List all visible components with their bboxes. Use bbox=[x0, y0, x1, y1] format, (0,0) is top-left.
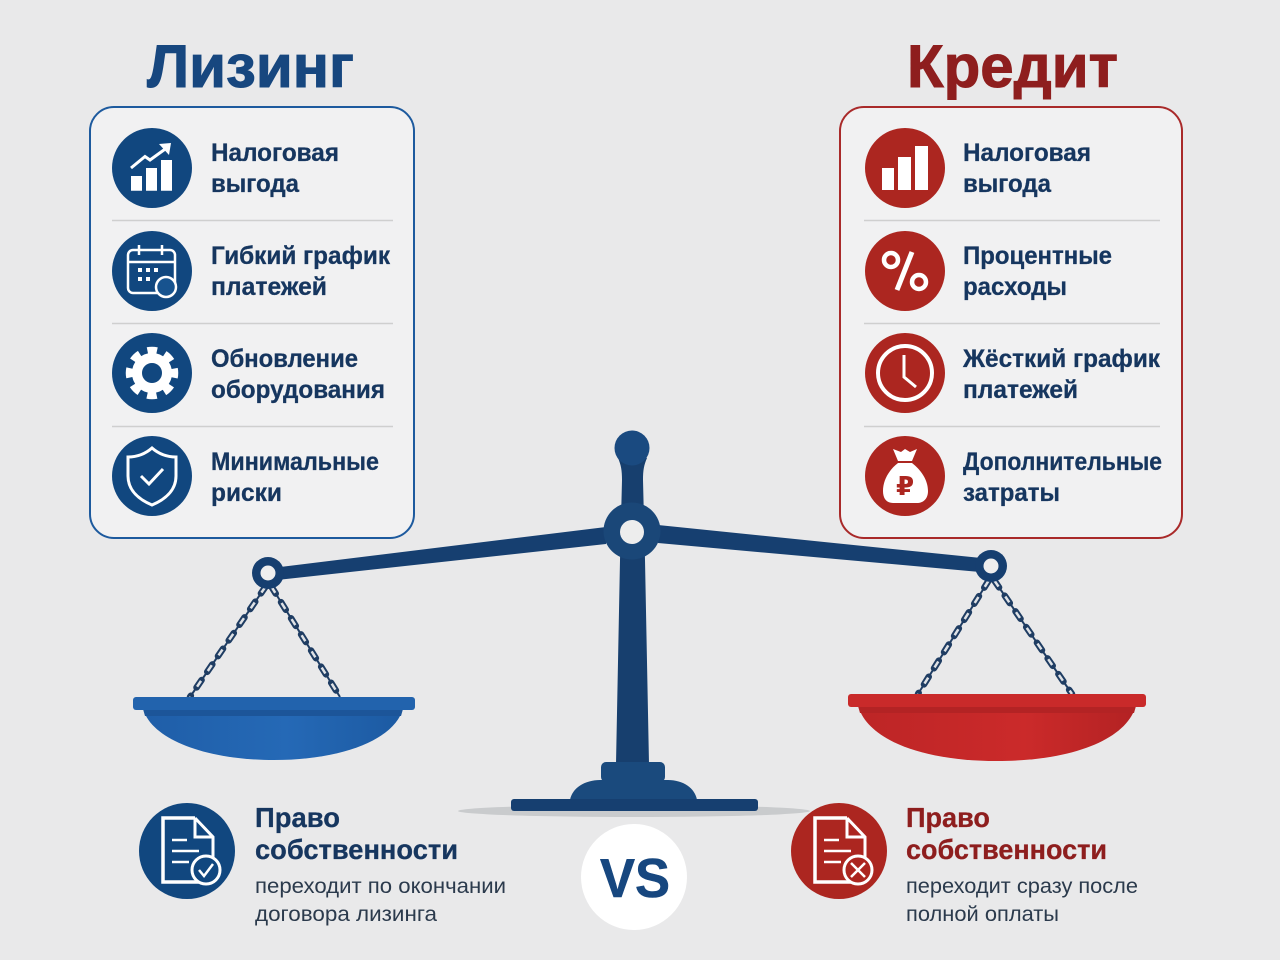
title: Кредит: Кредит bbox=[907, 33, 1118, 100]
icon: money bag bbox=[865, 436, 945, 516]
icon: gear bbox=[112, 333, 192, 413]
text: tax benefit bbox=[211, 139, 339, 198]
text: flexible schedule bbox=[211, 242, 390, 301]
left beam ring bbox=[252, 557, 284, 589]
beam bbox=[268, 525, 991, 581]
text: additional costs: затраты bbox=[963, 479, 1060, 507]
icon: money bag: ₽ bbox=[896, 471, 914, 501]
base bbox=[511, 762, 758, 811]
left pan bbox=[133, 697, 415, 760]
illustration: balance scale bbox=[133, 430, 1146, 817]
icon: growth chart bbox=[112, 128, 192, 208]
text: interest expenses: расходы bbox=[963, 273, 1067, 301]
text: interest expenses: Процентные bbox=[963, 242, 1112, 270]
text: rigid schedule: Жёсткий график bbox=[962, 345, 1160, 373]
text: rigid schedule bbox=[962, 345, 1160, 404]
text: equipment renewal: оборудования bbox=[211, 376, 385, 404]
text: minimal risks: Минимальные bbox=[211, 448, 379, 476]
text: ownership leasing: договора лизинга bbox=[255, 903, 437, 926]
icon: percent bbox=[865, 231, 945, 311]
text: minimal risks: риски bbox=[211, 479, 282, 507]
text: additional costs bbox=[963, 448, 1162, 507]
icon: shield bbox=[112, 436, 192, 516]
VS badge bbox=[581, 824, 687, 930]
icon: document cross bbox=[791, 803, 887, 899]
icon: clock bbox=[865, 333, 945, 413]
bottom block: leasing ownership bbox=[139, 802, 506, 926]
text: equipment renewal: Обновление bbox=[211, 345, 358, 373]
text: ownership leasing: переходит по окончании bbox=[255, 875, 506, 898]
bottom block: credit ownership bbox=[791, 802, 1138, 926]
title: Лизинг: Лизинг bbox=[147, 33, 354, 100]
left chains bbox=[190, 586, 340, 697]
text: tax benefit: Налоговая bbox=[963, 139, 1091, 167]
right beam ring bbox=[975, 550, 1007, 582]
text: ownership credit: Право bbox=[906, 802, 990, 833]
icon: bars bbox=[865, 128, 945, 208]
text: ownership credit: собственности bbox=[906, 834, 1107, 865]
knob bbox=[614, 430, 650, 466]
right chains bbox=[918, 580, 1072, 694]
hub bbox=[604, 502, 660, 560]
text: interest expenses bbox=[963, 242, 1112, 301]
column bbox=[616, 458, 649, 764]
text: ownership leasing: Право bbox=[255, 802, 340, 833]
text: tax benefit: выгода bbox=[963, 170, 1052, 198]
icon: calendar bbox=[112, 231, 192, 311]
text: tax benefit: Налоговая bbox=[211, 139, 339, 167]
text: rigid schedule: платежей bbox=[963, 376, 1078, 404]
VS badge: VS bbox=[600, 847, 670, 909]
text: ownership credit: переходит сразу после bbox=[906, 875, 1138, 898]
icon: document check bbox=[139, 803, 235, 899]
text: ownership leasing bbox=[255, 802, 506, 926]
panel: leasing bbox=[90, 107, 414, 538]
text: ownership leasing: собственности bbox=[255, 834, 458, 865]
text: equipment renewal bbox=[211, 345, 385, 404]
panel: credit bbox=[840, 107, 1182, 538]
text: flexible schedule: Гибкий график bbox=[211, 242, 390, 270]
text: flexible schedule: платежей bbox=[211, 273, 327, 301]
text: ownership credit: полной оплаты bbox=[906, 903, 1059, 926]
text: minimal risks bbox=[211, 448, 379, 507]
text: additional costs: Дополнительные bbox=[963, 448, 1162, 476]
text: tax benefit bbox=[963, 139, 1091, 198]
text: tax benefit: выгода bbox=[211, 170, 300, 198]
right pan bbox=[848, 694, 1146, 761]
text: ownership credit bbox=[906, 802, 1138, 926]
